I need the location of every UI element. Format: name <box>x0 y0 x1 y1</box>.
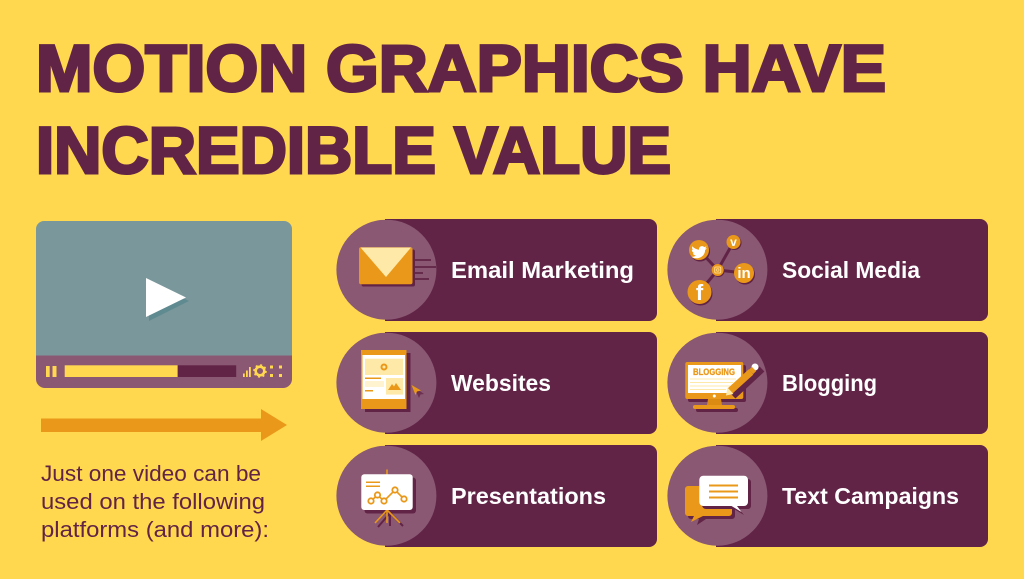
icon: social network <box>688 235 755 306</box>
arrow <box>41 409 287 441</box>
icon: envelope <box>359 247 436 286</box>
icon: web page <box>361 350 424 412</box>
caption text: Just one video can be <box>41 461 261 486</box>
icon: monitor and pencil: BLOGGING <box>693 367 735 378</box>
video player <box>36 221 292 388</box>
icon: chat bubbles <box>685 476 751 525</box>
caption text <box>41 461 269 542</box>
icon: presentation board <box>361 470 416 527</box>
title: MOTION GRAPHICS HAVE <box>36 31 886 105</box>
label: Presentations <box>451 483 606 509</box>
label: Text Campaigns <box>782 483 959 509</box>
panel: email marketing <box>336 219 657 321</box>
icon: social network: f <box>696 280 704 305</box>
label: Blogging <box>782 370 877 396</box>
panel: social media <box>667 219 988 321</box>
panel: websites <box>336 332 657 434</box>
title <box>36 31 886 187</box>
icon: monitor and pencil <box>685 362 762 412</box>
panel: blogging <box>667 332 988 434</box>
label: Websites <box>451 370 551 396</box>
panel: text campaigns <box>667 445 988 547</box>
icon: social network: in <box>737 265 751 282</box>
caption text: platforms (and more): <box>41 517 269 542</box>
caption text: used on the following <box>41 489 265 514</box>
panel: presentations <box>336 445 657 547</box>
label: Social Media <box>782 257 920 283</box>
title: INCREDIBLE VALUE <box>36 113 671 187</box>
label: Email Marketing <box>451 257 634 283</box>
icon: social network: v <box>730 235 737 249</box>
